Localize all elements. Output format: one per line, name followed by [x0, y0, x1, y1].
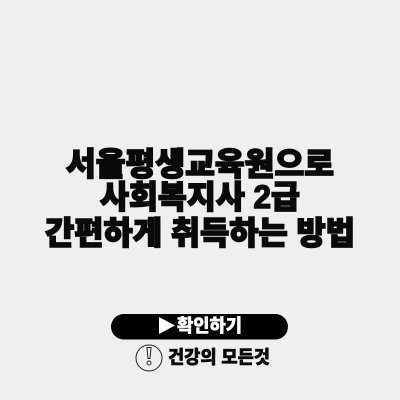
- button pill: [111, 314, 288, 340]
- title line 3: 간편하게 취득하는 방법: [45, 215, 355, 251]
- footer: 건강의 모든것: [136, 345, 270, 371]
- title line 1: 서울평생교육원으로: [66, 146, 334, 182]
- play arrow icon: [159, 317, 175, 334]
- title line 2: 사회복지사 2급: [100, 179, 300, 215]
- title: [45, 146, 355, 251]
- icon: exclamation in circle: [136, 345, 162, 371]
- button: 확인하기: [111, 314, 288, 340]
- footer label: 건강의 모든것: [168, 348, 270, 368]
- button label: 확인하기: [177, 315, 242, 336]
